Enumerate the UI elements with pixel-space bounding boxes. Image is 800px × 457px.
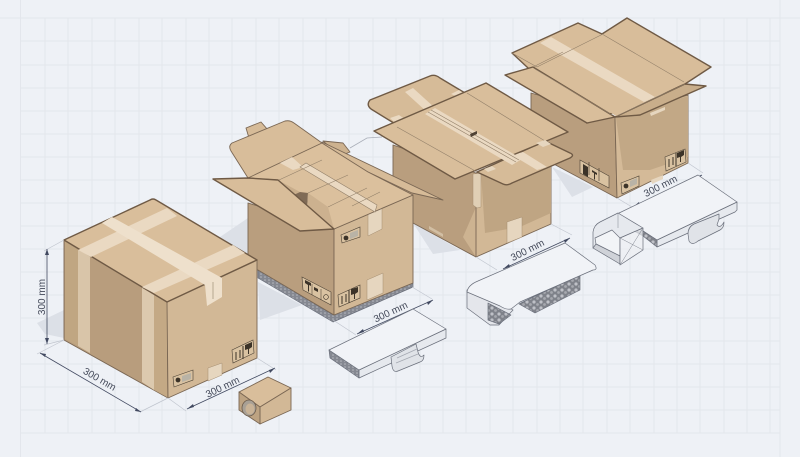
dimension: box 1 height: 300 mm bbox=[37, 279, 48, 315]
left face bbox=[64, 240, 168, 398]
flap back bbox=[512, 18, 711, 123]
right face shadow bbox=[616, 96, 688, 170]
lit corner bbox=[463, 207, 476, 257]
box 1: closed taped box bbox=[64, 199, 257, 398]
lid tape bbox=[425, 108, 522, 165]
small box top bbox=[239, 377, 291, 407]
left tape 1 bbox=[78, 250, 90, 353]
tape tabs bbox=[650, 107, 665, 184]
tape bbox=[540, 37, 655, 102]
box 4: open box, rear bbox=[505, 18, 711, 198]
right face bbox=[334, 195, 413, 315]
right flap bbox=[322, 142, 443, 200]
long tape bbox=[300, 163, 377, 212]
left face bbox=[248, 203, 334, 315]
small box bbox=[239, 377, 291, 424]
dimension: box 1 depth bbox=[37, 340, 168, 412]
tray body bbox=[657, 202, 737, 247]
small box front with window bbox=[239, 392, 260, 424]
opening bbox=[285, 192, 308, 210]
bottom tape bbox=[208, 363, 222, 381]
foam end bbox=[618, 215, 657, 247]
cube frame bbox=[593, 213, 643, 265]
top face bbox=[64, 199, 257, 302]
front-left flap bbox=[213, 178, 334, 231]
dimension: box 1 depth: 300 mm bbox=[81, 366, 118, 394]
label bbox=[621, 176, 639, 194]
right face shadow bbox=[476, 166, 551, 233]
lid bbox=[374, 83, 568, 179]
cross tape front bbox=[142, 245, 245, 293]
top panel bbox=[537, 34, 685, 116]
rear small flap bbox=[323, 141, 350, 156]
handling icons right bbox=[665, 149, 686, 171]
left end strip bbox=[65, 241, 78, 346]
clip bbox=[688, 214, 724, 244]
right face bbox=[615, 95, 688, 198]
flap right bbox=[615, 84, 706, 117]
right face bbox=[476, 165, 551, 257]
top sheet bbox=[467, 243, 596, 309]
right face bbox=[167, 260, 257, 398]
right flap bbox=[477, 141, 572, 185]
tray 3 with cube frame bbox=[593, 163, 737, 265]
dimension: box 1 height bbox=[37, 240, 64, 345]
dimension: 300 mm bbox=[509, 238, 546, 264]
dimension: 300 mm bbox=[372, 300, 410, 325]
bottom tape bbox=[507, 217, 522, 243]
inner slope right bbox=[307, 193, 334, 229]
thin curve bbox=[350, 137, 382, 148]
box 3: open box, third bbox=[368, 75, 572, 257]
inner slope left bbox=[250, 179, 300, 199]
dimension bbox=[617, 163, 703, 207]
top bbox=[329, 309, 446, 370]
side bbox=[467, 290, 513, 325]
tray 1 with clip bbox=[329, 287, 446, 378]
tray 2 with foam bbox=[467, 224, 596, 325]
icons right bbox=[338, 285, 360, 307]
post tape bbox=[473, 173, 481, 208]
dimension: box 1 width: 300 mm bbox=[204, 375, 242, 401]
clip bbox=[391, 344, 424, 371]
foam left bbox=[488, 303, 511, 324]
back flap bbox=[368, 75, 465, 125]
lid fold lines bbox=[279, 160, 380, 207]
front strip bbox=[154, 293, 167, 397]
small box right bbox=[260, 388, 291, 424]
lid interior bbox=[248, 143, 413, 229]
left face bbox=[393, 145, 476, 257]
dimension: 300 mm bbox=[642, 174, 679, 200]
handling icons left bbox=[580, 160, 609, 188]
box icons right bbox=[232, 340, 254, 363]
label bbox=[341, 227, 360, 243]
dimension: box 1 width bbox=[168, 358, 276, 411]
foam right bbox=[519, 275, 580, 313]
flap front left bbox=[505, 67, 615, 123]
label bbox=[173, 370, 193, 387]
ground shadows bbox=[37, 167, 593, 338]
box 2: opened box, second bbox=[213, 121, 443, 322]
side bbox=[359, 329, 446, 378]
tab bbox=[246, 122, 268, 138]
icons left bbox=[302, 277, 331, 305]
long tape bbox=[102, 217, 222, 306]
base foam bbox=[258, 270, 413, 322]
left face bbox=[531, 93, 617, 198]
left tab bbox=[429, 226, 443, 237]
tape bottom bbox=[367, 273, 383, 300]
cross tape rear bbox=[78, 208, 177, 257]
back-left flap bbox=[230, 121, 331, 178]
left tape 2 bbox=[142, 287, 154, 390]
end foam bbox=[329, 350, 359, 378]
tape top bbox=[368, 207, 382, 236]
short tape bbox=[280, 157, 303, 170]
